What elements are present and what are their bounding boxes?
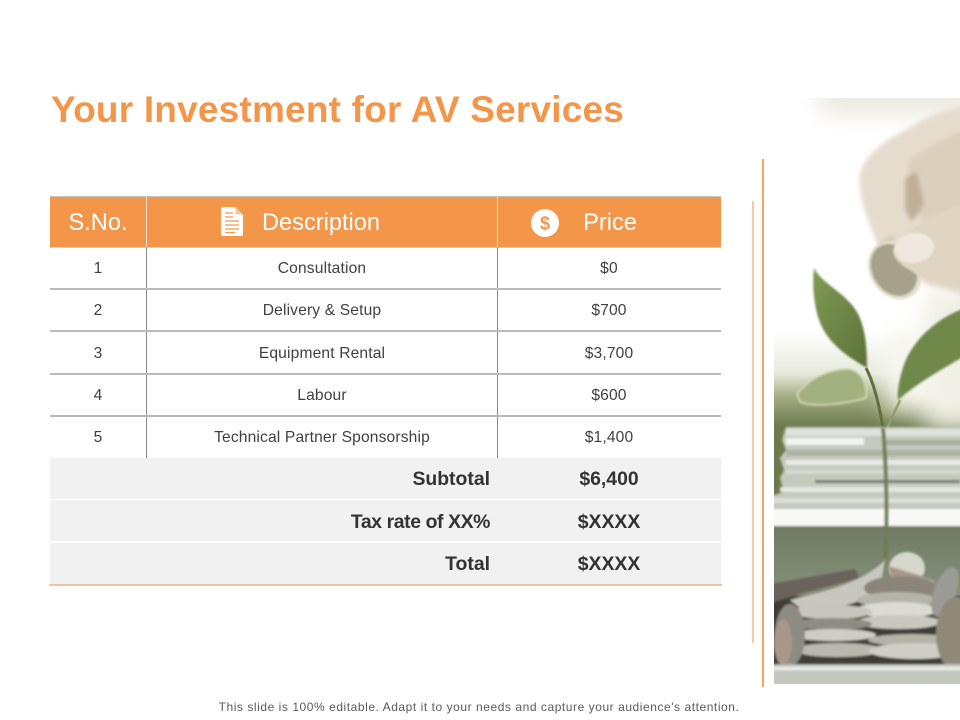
row 1: 1 <box>94 260 102 277</box>
footer note: This slide is 100% editable. Adapt it to your needs and capture your audience's attention. <box>219 700 739 714</box>
header dividers <box>146 197 147 247</box>
row 3: $3,700 <box>585 345 633 362</box>
subtotal row: $6,400 <box>579 468 639 490</box>
leaf: right <box>898 305 960 400</box>
tax row <box>50 500 721 541</box>
background coin <box>889 552 925 584</box>
row 2: 2 <box>94 302 102 319</box>
table: investment pricing <box>50 196 721 248</box>
row 4: 4 <box>94 387 102 404</box>
leaf: small <box>797 369 866 405</box>
jar <box>760 427 960 676</box>
body column dividers <box>146 247 147 458</box>
row 1 <box>94 260 618 277</box>
photo: coin into jar with seedling <box>774 98 960 684</box>
header: Price: Price <box>583 210 637 236</box>
row 1: $0 <box>600 260 618 277</box>
header: S.No.: S.No. <box>68 210 128 236</box>
thumb <box>892 198 960 290</box>
row 4 <box>94 387 627 404</box>
row lines <box>50 288 721 290</box>
hand <box>859 102 960 300</box>
row 5: Technical Partner Sponsorship <box>214 429 430 446</box>
total row: $XXXX <box>578 553 640 575</box>
icon: document <box>221 207 243 236</box>
row 4: Labour <box>297 387 347 404</box>
coin <box>857 230 933 310</box>
row 3: 3 <box>94 345 102 362</box>
tax row: $XXXX <box>578 511 640 533</box>
row 2 <box>94 302 627 319</box>
row 3: Equipment Rental <box>259 345 385 362</box>
row 3 <box>94 345 633 362</box>
row 1: Consultation <box>278 260 366 277</box>
subtotal row <box>50 458 721 499</box>
total row <box>50 543 721 584</box>
tax row: Tax rate of XX% <box>351 511 490 533</box>
title: Your Investment for AV Services <box>51 89 624 130</box>
leaf: upper <box>813 268 867 368</box>
icon: dollar coin: $ <box>540 214 550 234</box>
icon: dollar coin <box>531 209 559 237</box>
header: Description: Description <box>262 210 380 236</box>
row 5: $1,400 <box>585 429 633 446</box>
header row <box>50 196 721 248</box>
jar base <box>765 664 960 694</box>
total row: Total <box>445 553 490 575</box>
row 2: Delivery & Setup <box>263 302 381 319</box>
subtotal row: Subtotal <box>412 468 490 490</box>
accent line: short <box>752 201 754 643</box>
row 4: $600 <box>591 387 627 404</box>
row 5 <box>94 429 633 446</box>
accent line: long <box>762 159 764 687</box>
row 2: $700 <box>591 302 627 319</box>
stem in jar <box>883 428 886 558</box>
table bottom rule <box>49 584 722 586</box>
coins <box>770 560 960 671</box>
stem <box>866 368 883 428</box>
soft background <box>820 85 960 430</box>
row 5: 5 <box>94 429 102 446</box>
